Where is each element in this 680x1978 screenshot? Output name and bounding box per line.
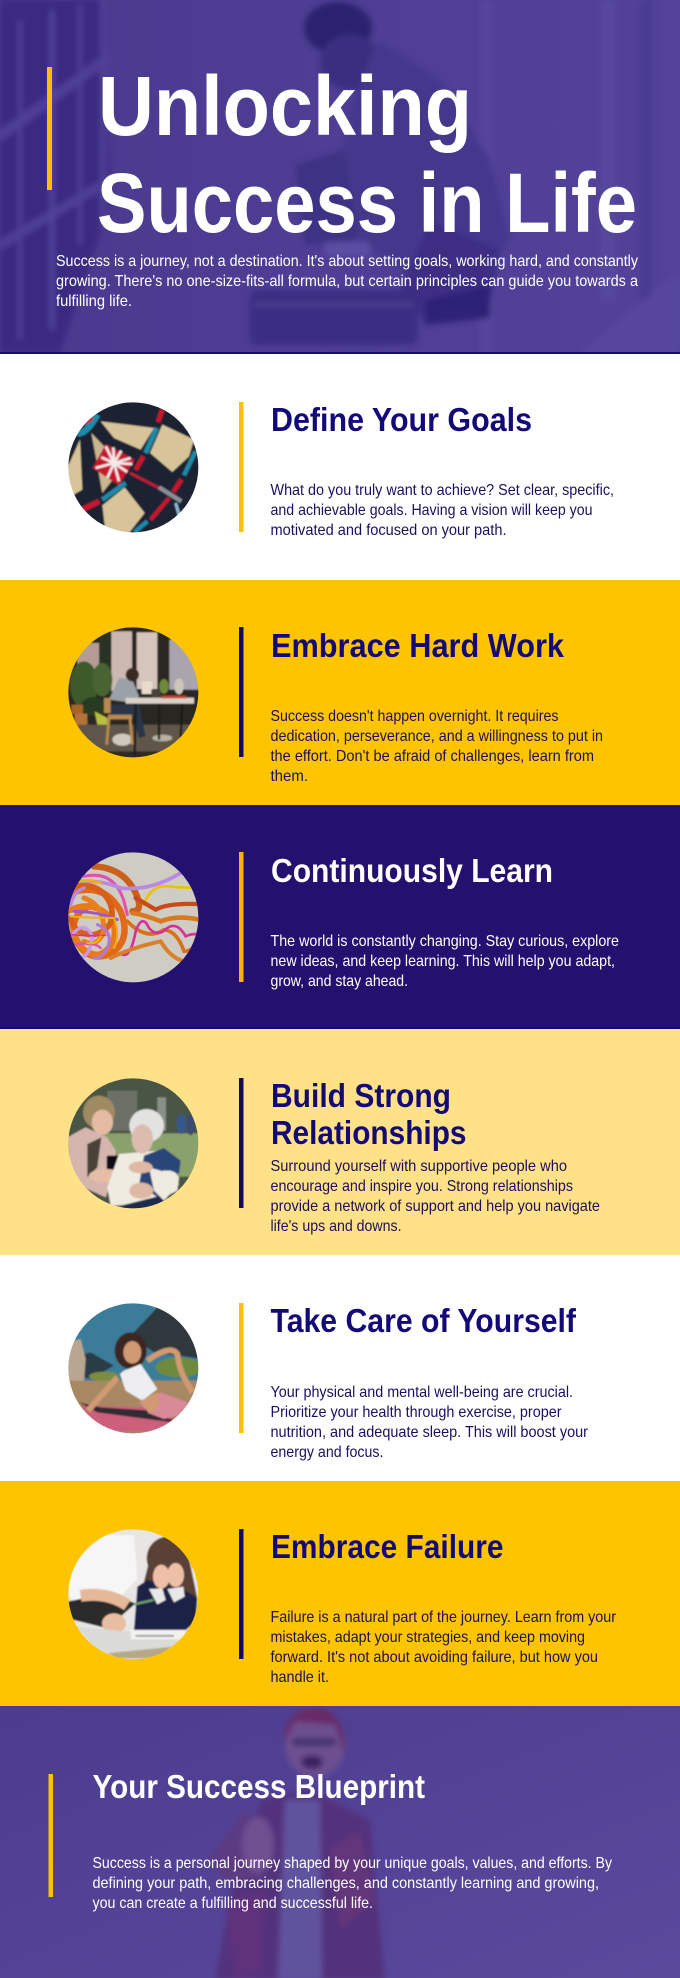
footer background photo: cheering man <box>0 1706 680 1978</box>
panel: embrace failure <box>0 1481 680 1706</box>
body text: Your physical and mental well-being are crucial. <box>270 1384 573 1401</box>
photo: two women with a phone <box>68 1078 198 1208</box>
hero title <box>97 59 637 250</box>
panel: your success blueprint <box>0 1706 680 1978</box>
hero intro text: growing. There's no one-size-fits-all formula, but certain principles can guide you towards a <box>56 273 638 290</box>
body text: motivated and focused on your path. <box>270 522 506 539</box>
body text: provide a network of support and help you navigate <box>270 1198 600 1215</box>
photo: dartboard <box>68 402 198 532</box>
heading <box>271 1077 466 1151</box>
body text: Success doesn't happen overnight. It requires <box>270 708 558 725</box>
footer body text: defining your path, embracing challenges, and constantly learning and growing, <box>92 1875 599 1892</box>
body text: energy and focus. <box>270 1444 384 1461</box>
heading: Embrace Hard Work <box>271 627 565 664</box>
heading: Take Care of Yourself <box>270 1302 577 1339</box>
footer accent bar <box>48 1774 53 1897</box>
photo: upset student at desk <box>68 1529 198 1660</box>
panel: define your goals <box>68 402 613 538</box>
heading: Relationships <box>271 1114 466 1151</box>
body text: Surround yourself with supportive people who <box>270 1158 567 1175</box>
hero title: Unlocking <box>98 59 472 153</box>
divider bar <box>239 627 244 757</box>
body text: forward. It's not about avoiding failure, but how you <box>270 1649 598 1666</box>
body text: handle it. <box>270 1669 329 1686</box>
body text: new ideas, and keep learning. This will help you adapt, <box>270 953 615 970</box>
photo: tangled coloured strands <box>68 852 198 982</box>
heading: Continuously Learn <box>271 852 553 889</box>
body text: Prioritize your health through exercise, proper <box>270 1404 562 1421</box>
hero accent bar <box>47 67 52 190</box>
footer body text: you can create a fulfilling and successful life. <box>92 1895 373 1912</box>
body text: life's ups and downs. <box>270 1218 402 1235</box>
photo: woman doing yoga on a cliff <box>68 1303 198 1434</box>
divider bar <box>239 1078 244 1208</box>
divider bar <box>239 1529 244 1659</box>
divider bar <box>239 852 244 982</box>
divider bar <box>239 402 244 532</box>
body text: them. <box>270 768 308 785</box>
body text: dedication, perseverance, and a willingness to put in <box>270 728 603 745</box>
body text <box>270 1609 617 1686</box>
body text: mistakes, adapt your strategies, and keep moving <box>270 1629 585 1646</box>
body text: nutrition, and adequate sleep. This will boost your <box>270 1424 589 1441</box>
hero intro text <box>56 253 638 310</box>
heading: Define Your Goals <box>271 401 532 438</box>
body text <box>270 933 619 990</box>
body text <box>270 1158 600 1235</box>
body text: the effort. Don't be afraid of challenges, learn from <box>270 748 594 765</box>
divider bar <box>239 1303 244 1433</box>
footer heading: Your Success Blueprint <box>92 1768 425 1805</box>
panel: continuously learn <box>0 805 680 1029</box>
hero intro text: fulfilling life. <box>56 293 132 310</box>
body text: grow, and stay ahead. <box>270 973 408 990</box>
footer body text: Success is a personal journey shaped by your unique goals, values, and efforts. By <box>92 1855 612 1872</box>
body text <box>270 708 603 785</box>
heading: Build Strong <box>271 1077 451 1114</box>
body text <box>270 482 614 539</box>
body text: The world is constantly changing. Stay curious, explore <box>270 933 619 950</box>
hero background photo: man with suitcase <box>0 0 680 353</box>
panel: hero header <box>0 0 680 354</box>
body text: encourage and inspire you. Strong relationships <box>270 1178 573 1195</box>
panel: take care of yourself <box>68 1303 588 1460</box>
body text: and achievable goals. Having a vision will keep you <box>270 502 592 519</box>
photo: person working at table <box>68 627 198 758</box>
body text <box>270 1384 589 1461</box>
panel: build strong relationships <box>0 1029 680 1255</box>
footer body text <box>92 1855 612 1912</box>
heading: Embrace Failure <box>271 1528 504 1565</box>
panel: embrace hard work <box>0 580 680 805</box>
body text: What do you truly want to achieve? Set clear, specific, <box>270 482 614 499</box>
body text: Failure is a natural part of the journey. Learn from your <box>270 1609 617 1626</box>
